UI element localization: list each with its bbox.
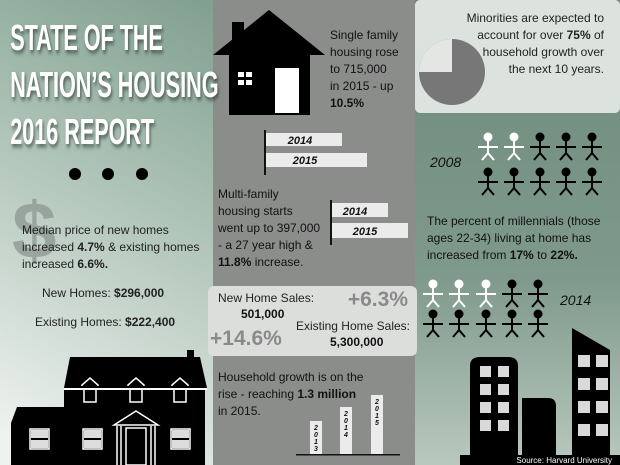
- text: household growth: Household growth is on the: [218, 370, 364, 384]
- bar chart: household growth: 2: [343, 411, 348, 418]
- title: 2016 REPORT: [10, 112, 154, 152]
- icon: buildings: [460, 328, 620, 465]
- bar chart: household growth: [296, 395, 400, 456]
- text: single family: to 715,000: [330, 62, 387, 76]
- people: 2014: 2014: [559, 292, 591, 308]
- panel: home sales: New Home Sales:: [218, 291, 314, 305]
- bar chart: household growth: 1: [344, 425, 348, 432]
- title: STATE OF THE: [10, 18, 163, 58]
- bar chart: household growth: 1: [375, 413, 379, 420]
- panel: home sales: 5,300,000: [330, 335, 384, 349]
- text: millennials: increased from 17% to 22%.: [427, 248, 578, 262]
- bar chart: multi-family: 2014: [342, 206, 367, 218]
- icon: dollar sign: $: [12, 186, 56, 275]
- panel: home sales: Existing Home Sales:: [296, 319, 410, 333]
- text: multi-family: Multi-family: [218, 187, 279, 201]
- people: 2008: [429, 132, 602, 195]
- text: household growth: [218, 370, 364, 418]
- panel: home sales: 501,000: [241, 307, 285, 321]
- text: median price: Existing Homes: $222,400: [35, 315, 175, 329]
- text: single family: [330, 28, 399, 110]
- bar chart: single family: 2015: [292, 155, 318, 167]
- panel: home sales: [208, 286, 417, 356]
- bar chart: multi-family: 2015: [352, 226, 378, 238]
- bar chart: household growth: 3: [314, 446, 318, 453]
- bar chart: household growth: 1: [314, 439, 318, 446]
- text: median price: [22, 223, 199, 329]
- text: multi-family: 11.8% increase.: [218, 255, 303, 269]
- panel: minorities: account for over 75% of: [477, 28, 605, 42]
- text: single family: Single family: [330, 28, 398, 42]
- title: NATION’S HOUSING: [10, 65, 219, 105]
- bar chart: household growth: 5: [375, 420, 379, 427]
- panel: minorities: household growth over: [483, 45, 604, 59]
- text: multi-family: - a 27 year high &: [218, 238, 313, 252]
- text: median price: increased 4.7% & existing homes: [22, 240, 199, 254]
- text: millennials: The percent of millennials (those: [427, 214, 601, 228]
- text: single family: 10.5%: [330, 96, 364, 110]
- bar chart: household growth: 0: [314, 432, 318, 439]
- text: household growth: rise - reaching 1.3 million: [218, 387, 356, 401]
- panel: home sales: +6.3%: [348, 288, 408, 311]
- panel: home sales: +14.6%: [210, 327, 282, 350]
- dots: [69, 168, 148, 180]
- people: 2008: 2008: [429, 154, 461, 170]
- title: [10, 18, 219, 152]
- text: millennials: [427, 214, 601, 262]
- panel: minorities: [415, 0, 620, 113]
- bar chart: single family: [264, 130, 367, 175]
- bar chart: household growth: 4: [343, 432, 348, 439]
- text: single family: housing rose: [330, 45, 399, 59]
- bar chart: household growth: 0: [344, 418, 348, 425]
- bar chart: household growth: 2: [313, 425, 318, 432]
- text: multi-family: housing starts: [218, 204, 293, 218]
- bar chart: single family: 2014: [287, 135, 312, 147]
- bar chart: multi-family: [330, 200, 408, 245]
- text: single family: in 2015 - up: [330, 79, 394, 93]
- text: median price: Median price of new homes: [22, 223, 169, 237]
- source: Source: Harvard University: [516, 456, 612, 465]
- icon: colonial house: [11, 350, 207, 465]
- text: multi-family: [217, 187, 320, 269]
- panel: minorities: Minorities are expected to: [467, 11, 604, 25]
- text: millennials: ages 22-34) living at home has: [427, 231, 591, 245]
- text: median price: New Homes: $296,000: [42, 286, 164, 300]
- icon: single family house: [213, 10, 325, 115]
- text: multi-family: went up to 397,000: [217, 221, 320, 235]
- people: 2014: [423, 280, 591, 337]
- bar chart: household growth: 2: [374, 399, 379, 406]
- panel: minorities: the next 10 years.: [509, 62, 604, 76]
- text: household growth: in 2015.: [218, 404, 261, 418]
- text: median price: increased 6.6%.: [22, 257, 108, 271]
- bar chart: household growth: 0: [375, 406, 379, 413]
